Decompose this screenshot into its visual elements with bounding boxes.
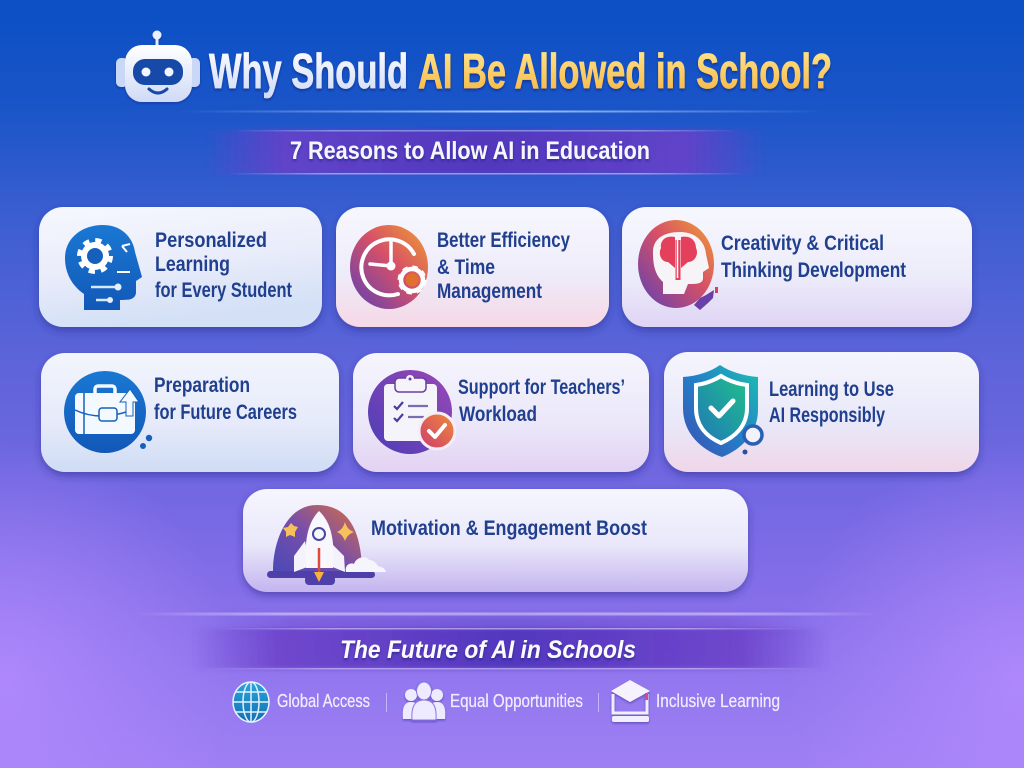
text: creativity [721, 232, 906, 282]
label: inclusive learning: Inclusive Learning [656, 691, 780, 711]
label: global access: Global Access [277, 691, 370, 711]
icon: shield with check [683, 365, 762, 457]
banner: subtitle [205, 130, 765, 174]
heading: title [209, 45, 832, 99]
panel: better efficiency [336, 207, 609, 327]
banner: future of AI [190, 616, 830, 670]
text: creativity: Creativity & Critical [721, 232, 884, 255]
text: future careers [154, 374, 297, 424]
icon: rocket [267, 505, 386, 585]
text: teachers workload: Support for Teachers’ [458, 376, 625, 399]
banner: subtitle: 7 Reasons to Allow AI in Education [290, 137, 650, 165]
heading: title: Why Should [209, 45, 408, 99]
panel: teachers workload [353, 353, 649, 472]
icon: robot head [116, 30, 200, 102]
text: personalized learning: Personalized [155, 229, 267, 252]
text: teachers workload [458, 376, 625, 426]
icon: briefcase [64, 371, 152, 453]
text: responsible AI: Learning to Use [769, 378, 894, 401]
label: equal opportunities: Equal Opportunities [450, 691, 583, 711]
panel: future careers [41, 353, 339, 472]
text: better efficiency: & Time [437, 256, 495, 279]
footer: future benefits row [233, 680, 780, 722]
icon: clipboard with check [368, 370, 455, 454]
icon: globe [233, 682, 269, 722]
banner: future of AI: The Future of AI in Schools [340, 636, 636, 664]
icon: graduation cap and laptop [611, 680, 650, 722]
text: responsible AI: AI Responsibly [769, 404, 885, 427]
text: better efficiency [437, 229, 570, 303]
icon: clock and gear [350, 225, 428, 309]
text: better efficiency: Better Efficiency [437, 229, 570, 252]
title row [116, 30, 832, 102]
panel: responsible AI [664, 352, 979, 472]
text: future careers: for Future Careers [154, 401, 297, 424]
text: better efficiency: Management [437, 280, 542, 303]
text: personalized learning: Learning [155, 253, 230, 276]
panel: motivation [243, 489, 748, 592]
panel: personalized learning [39, 207, 322, 327]
icon: head with gear [65, 225, 142, 310]
text: personalized learning: for Every Student [155, 279, 292, 302]
heading: title: AI Be Allowed in School? [418, 45, 832, 99]
panel: creativity [622, 207, 972, 327]
text: teachers workload: Workload [459, 403, 537, 426]
icon: head with brain [638, 220, 718, 310]
text: responsible AI [769, 378, 894, 427]
text: personalized learning [155, 229, 292, 302]
text: motivation: Motivation & Engagement Boost [371, 517, 647, 540]
text: creativity: Thinking Development [721, 259, 906, 282]
text: future careers: Preparation [154, 374, 250, 397]
icon: people [403, 682, 445, 720]
